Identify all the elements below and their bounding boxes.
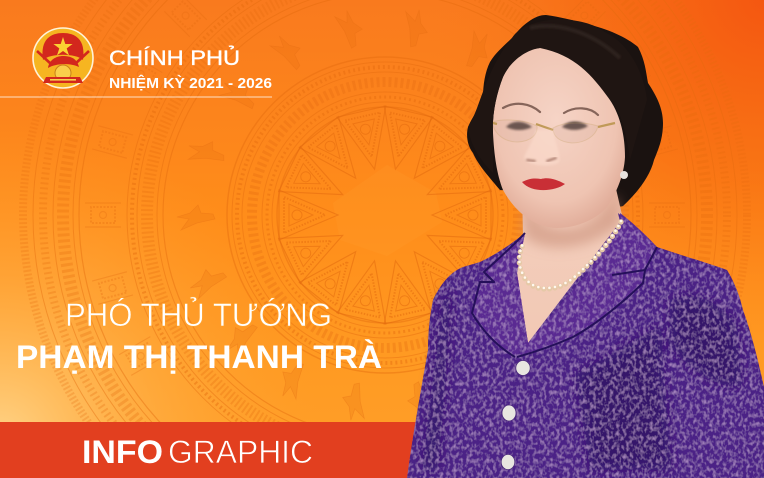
lapel edges: [472, 233, 657, 357]
jacket shadows: [422, 285, 742, 470]
face: [493, 48, 625, 228]
icon: national emblem: [33, 28, 93, 88]
portrait: [407, 15, 764, 478]
eyebrows: [503, 104, 598, 115]
hair back: [467, 15, 663, 206]
header term: NHIỆM KỲ 2021 - 2026: [109, 74, 272, 92]
neck and chest: [512, 180, 625, 345]
neck shadow: [523, 195, 620, 248]
infographic label: [82, 434, 313, 470]
mouth: [522, 178, 565, 190]
nose: [524, 130, 560, 165]
earring: [620, 171, 628, 179]
glasses: [489, 120, 615, 143]
role heading: PHÓ THỦ TƯỚNG: [65, 297, 332, 333]
right lapel: [517, 213, 657, 357]
header rule: [0, 96, 272, 98]
pearl necklace: [519, 221, 621, 289]
red bottom bar: [0, 422, 764, 478]
jacket: [407, 213, 764, 478]
nostrils: [527, 158, 556, 161]
infographic label: INFO: [82, 434, 163, 470]
hair highlight: [530, 26, 620, 58]
infographic label: GRAPHIC: [168, 434, 313, 470]
buttons: [501, 360, 530, 470]
header title: CHÍNH PHỦ: [109, 46, 240, 70]
hair front: [468, 19, 647, 173]
name heading: PHẠM THỊ THANH TRÀ: [16, 339, 382, 375]
eyes: [506, 122, 588, 130]
left lapel: [472, 233, 528, 357]
